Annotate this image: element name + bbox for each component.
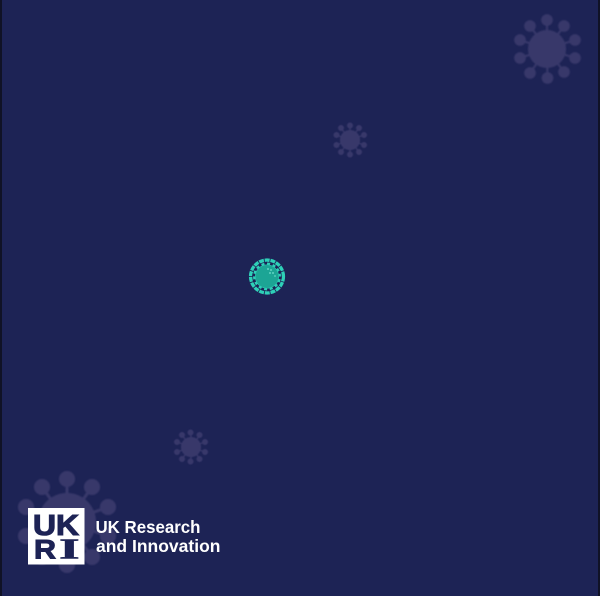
wordmark: UK Research and Innovation: UK Research	[96, 517, 200, 537]
UKRI logo square: R	[34, 534, 56, 564]
icon: large faded virus behind logo	[18, 471, 116, 573]
icon: large faded virus, top right	[514, 14, 581, 84]
UKRI logo square: UK	[33, 510, 79, 542]
icon: teal virus, centre	[251, 260, 283, 293]
UKRI logo square: I	[59, 534, 80, 565]
icon: small faded virus, upper centre	[334, 122, 367, 158]
wordmark: UK Research and Innovation: and Innovation	[96, 536, 220, 556]
UKRI logo square	[28, 508, 84, 565]
wordmark: UK Research and Innovation	[96, 517, 220, 556]
icon: small faded virus, lower centre	[174, 430, 208, 464]
